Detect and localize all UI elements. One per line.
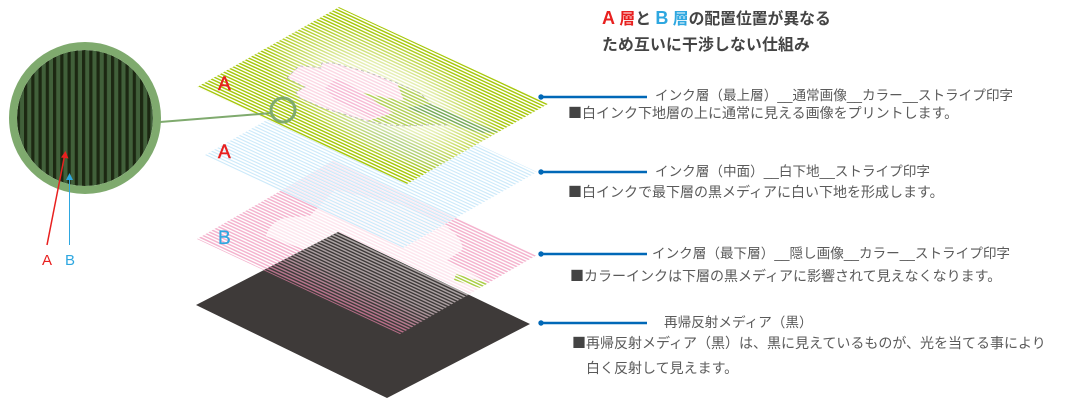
leader line middle layer — [538, 169, 647, 175]
description lower layer: ■カラーインクは下層の黒メディアに影響されて見えなくなります。 — [570, 266, 1001, 286]
magnifier connector line — [160, 113, 272, 122]
layer letter B: B — [218, 228, 231, 249]
label media: 再帰反射メディア（黒） — [664, 315, 813, 330]
leader line media — [538, 320, 647, 326]
description media line 2: 白く反射して見えます。 — [586, 360, 738, 376]
label top layer: インク層（最上層）__通常画像__カラー__ストライプ印字 — [655, 88, 1013, 103]
heading line 2: ため互いに干渉しない仕組み — [602, 37, 810, 54]
description top layer: ■白インク下地層の上に通常に見える画像をプリントします。 — [568, 103, 958, 123]
label middle layer: インク層（中面）__白下地__ストライプ印字 — [655, 164, 930, 179]
magnifier small ring — [271, 98, 295, 122]
magnified stripes circle — [13, 46, 157, 190]
black retroreflective media layer — [196, 232, 530, 398]
description media line 1: ■再帰反射メディア（黒）は、黒に見えているものが、光を当てる事により — [572, 333, 1046, 353]
label B: B — [65, 252, 75, 269]
flower outline — [287, 63, 447, 126]
green top ink layer with flower image — [197, 7, 548, 184]
heading line 1: A 層と B 層の配置位置が異なる — [602, 8, 831, 28]
blue arrow B — [66, 173, 73, 245]
label lower layer: インク層（最下層）__隠し画像__カラー__ストライプ印字 — [652, 246, 1010, 261]
pink hidden-image ink layer — [197, 161, 536, 334]
leader line top layer — [538, 94, 647, 100]
leader line lower layer — [538, 251, 647, 257]
red arrow A — [47, 151, 68, 245]
layer letter A middle: A — [218, 142, 231, 163]
layered diagram and magnified circle — [9, 7, 647, 398]
label A: A — [42, 252, 52, 269]
layer letter A top: A — [218, 74, 231, 95]
flower image — [287, 63, 498, 133]
blue white-underlayer ink layer — [205, 120, 537, 248]
description middle layer: ■白インクで最下層の黒メディアに白い下地を形成します。 — [568, 182, 944, 202]
